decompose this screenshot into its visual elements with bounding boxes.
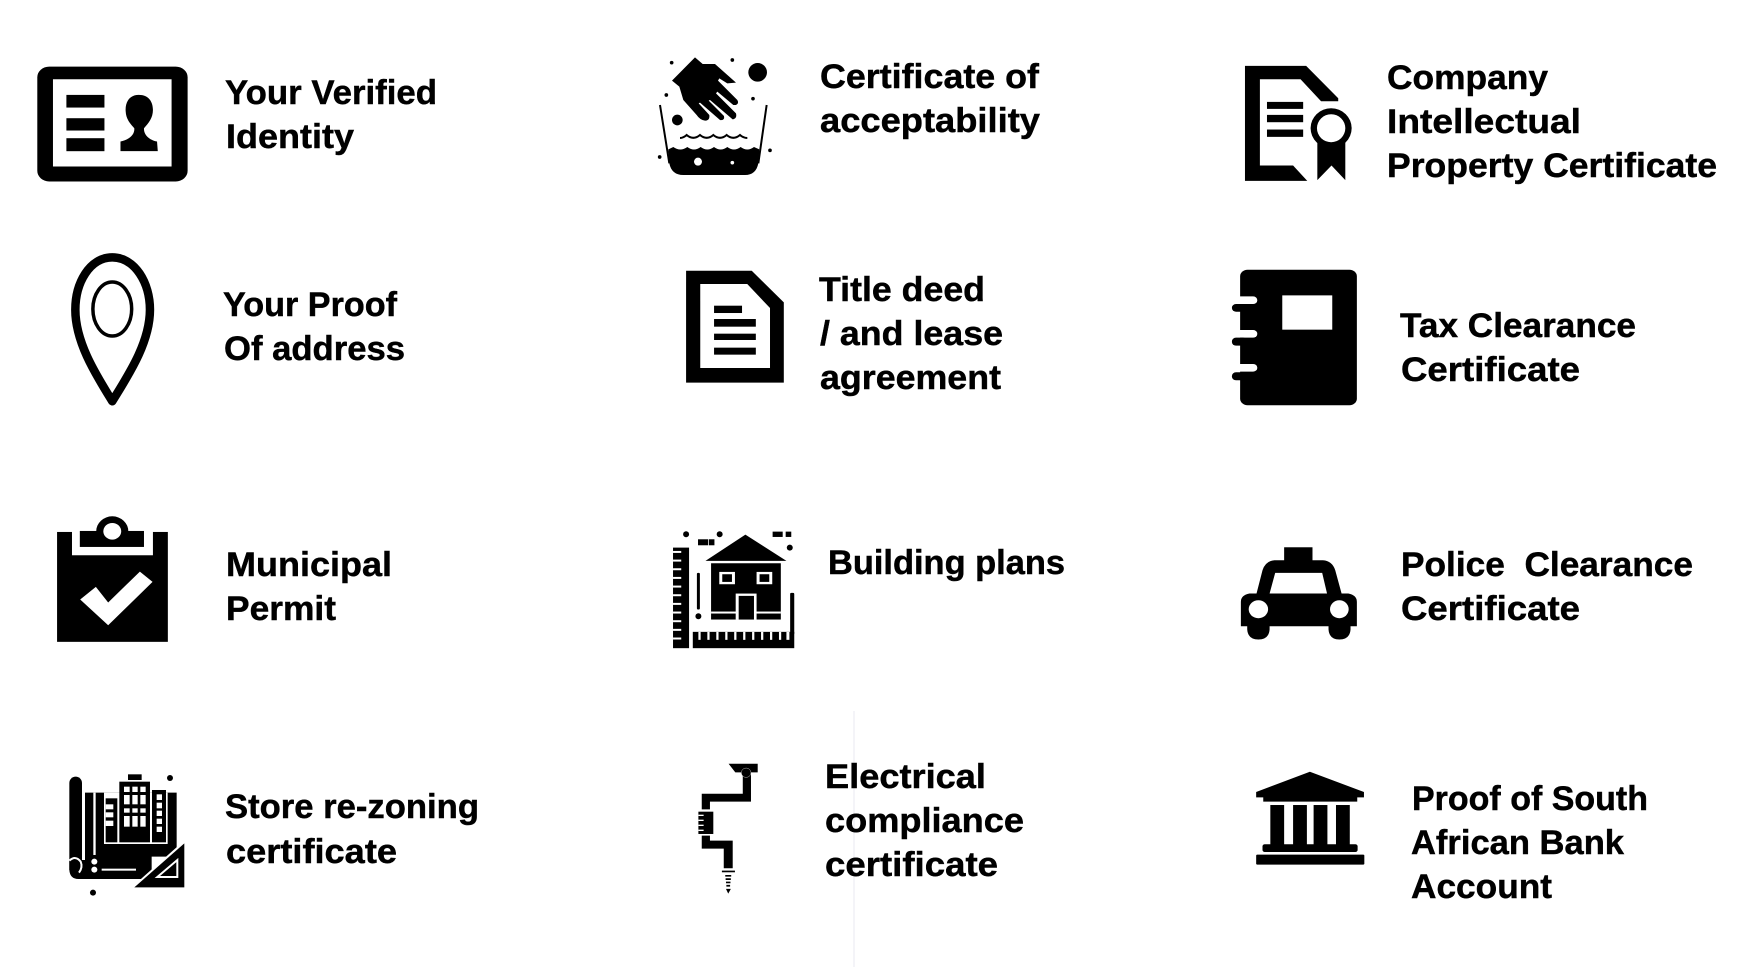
- text: Title deed and lease agreement: [819, 271, 1003, 397]
- icon: house with rulers: [673, 531, 794, 648]
- icon: document: [686, 271, 784, 383]
- text: Your Proof Of address: Of address: [224, 330, 405, 368]
- text: Electrical compliance certificate: [825, 758, 1024, 884]
- icon: notebook: [1232, 270, 1357, 405]
- text: Your Verified Identity: Identity: [226, 118, 354, 156]
- text: Proof of South African Bank Account: Account: [1411, 868, 1552, 906]
- text: Certificate of acceptability: [820, 58, 1040, 140]
- item: tax clearance: [1232, 270, 1636, 405]
- item: police clearance: [1241, 546, 1693, 640]
- text: Company Intellectual Property Certificate: Intellectual: [1387, 103, 1581, 141]
- text: Your Proof Of address: Your Proof: [223, 286, 398, 324]
- item: company IP certificate: [1245, 59, 1717, 185]
- icon: clipboard with check: [57, 516, 168, 642]
- icon: blueprint with buildings: [69, 774, 187, 896]
- item: certificate of acceptability: [658, 57, 1040, 175]
- icon: ID card: [37, 67, 188, 181]
- text: Electrical compliance certificate: compliance: [825, 802, 1024, 840]
- text: Your Verified Identity: [225, 74, 437, 156]
- text: Your Proof Of address: [223, 286, 405, 368]
- text: Tax Clearance Certificate: Tax Clearance: [1400, 307, 1636, 345]
- icon: certificate with rosette: [1245, 66, 1352, 181]
- text: Title deed and lease agreement: agreement: [820, 359, 1001, 397]
- text: Company Intellectual Property Certificate: [1387, 59, 1717, 185]
- text: Electrical compliance certificate: certificate: [825, 846, 998, 884]
- text: Title deed and lease agreement: / and lease: [820, 315, 1003, 353]
- text: Police Clearance Certificate: Certificate: [1401, 590, 1580, 628]
- text: Municipal Permit: [226, 546, 392, 628]
- item: building plans: [673, 531, 1065, 648]
- text: Building plans: Building plans: [828, 544, 1065, 582]
- text: Tax Clearance Certificate: Certificate: [1401, 351, 1580, 389]
- text: Municipal Permit: Permit: [226, 590, 336, 628]
- icon: location pin: [75, 257, 150, 401]
- text: Police Clearance Certificate: [1401, 546, 1693, 628]
- text: Municipal Permit: Municipal: [226, 546, 392, 584]
- text: Your Verified Identity: Your Verified: [225, 74, 437, 112]
- item: electrical compliance: [698, 758, 1024, 894]
- text: Store re-zoning certificate: [225, 788, 479, 871]
- text: Store re-zoning certificate: certificate: [226, 833, 397, 871]
- item: verified identity: [37, 67, 437, 181]
- text: Store re-zoning certificate: Store re-zoning: [225, 788, 479, 826]
- item: store re-zoning: [69, 774, 479, 896]
- text: Company Intellectual Property Certificate: Property Certificate: [1387, 147, 1717, 185]
- text: Proof of South African Bank Account: Proof of South: [1412, 780, 1648, 818]
- icon: hand over water basin: [658, 57, 772, 175]
- text: Electrical compliance certificate: Electrical: [825, 758, 986, 796]
- icon: police car: [1241, 547, 1357, 640]
- text: Certificate of acceptability: Certificate of: [820, 58, 1040, 96]
- text: Proof of South African Bank Account: [1411, 780, 1648, 906]
- item: municipal permit: [57, 516, 392, 642]
- text: Company Intellectual Property Certificate: Company: [1387, 59, 1548, 97]
- text: Tax Clearance Certificate: [1400, 307, 1636, 389]
- icon: electrical conduit and screw: [698, 764, 758, 894]
- item: bank account: [1256, 772, 1648, 906]
- icon: bank building: [1256, 772, 1364, 865]
- text: Title deed and lease agreement: Title deed: [819, 271, 985, 309]
- item: proof of address: [75, 257, 405, 401]
- item: title deed: [686, 271, 1003, 397]
- text: Proof of South African Bank Account: African Bank: [1411, 824, 1624, 862]
- text: Certificate of acceptability: acceptability: [820, 102, 1040, 140]
- text: Police Clearance Certificate: Police Clearance: [1401, 546, 1693, 584]
